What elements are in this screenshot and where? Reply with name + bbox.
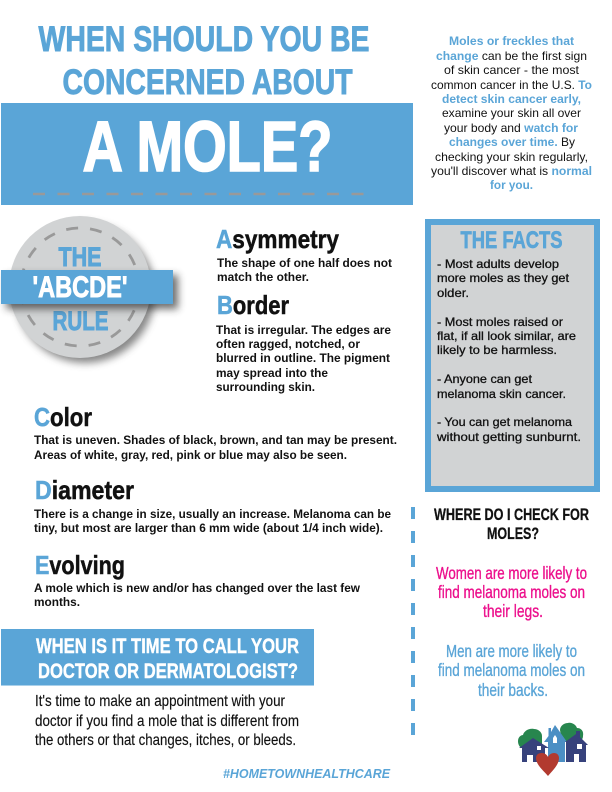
- panel: the facts: THE FACTS: [460, 227, 562, 254]
- panel: the facts: more moles as they get: [437, 271, 570, 285]
- diameter: There is a change in size, usually an increase. Melanoma can be: [34, 507, 391, 521]
- intro text: detect skin cancer early,: [442, 92, 581, 106]
- women note: their legs.: [483, 601, 543, 621]
- intro text: of skin cancer - the most: [444, 63, 580, 77]
- evolving: Evolving: [35, 550, 125, 580]
- title banner: a mole: [1, 103, 413, 205]
- badge: the ABCDE rule: [1, 216, 178, 363]
- intro text: checking your skin regularly,: [435, 150, 588, 164]
- asymmetry: match the other.: [217, 270, 309, 284]
- border: may spread into the: [216, 366, 328, 380]
- border: surrounding skin.: [216, 380, 315, 394]
- intro text: common cancer in the U.S. To: [431, 78, 592, 92]
- border: That is irregular. The edges are: [216, 323, 391, 337]
- intro text: [431, 34, 592, 192]
- panel: the facts: likely to be harmless.: [437, 343, 557, 357]
- title: WHEN SHOULD YOU BE: [38, 19, 370, 59]
- badge: the ABCDE rule: RULE: [52, 306, 108, 336]
- intro text: changes over time. By: [449, 135, 575, 149]
- where to check heading: MOLES?: [487, 524, 539, 543]
- intro text: you'll discover what is normal: [431, 164, 592, 178]
- call to action text: [35, 693, 299, 749]
- diameter: [34, 475, 391, 535]
- intro text: your body and watch for: [444, 121, 578, 135]
- diameter: tiny, but most are larger than 6 mm wide (about 1/4 inch wide).: [34, 521, 383, 535]
- border: blurred in outline. The pigment: [216, 351, 390, 365]
- badge: the ABCDE rule: 'ABCDE': [32, 271, 128, 304]
- intro text: examine your skin all over: [442, 106, 581, 120]
- asymmetry: Asymmetry: [216, 224, 339, 254]
- color: That is uneven. Shades of black, brown, and tan may be present.: [34, 433, 397, 447]
- men note: [438, 641, 585, 700]
- panel: the facts: without getting sunburnt.: [436, 430, 581, 444]
- where to check heading: [434, 505, 589, 543]
- evolving: A mole which is new and/or has changed over the last few: [34, 581, 361, 595]
- icon: hometown houses and heart logo: [518, 723, 588, 776]
- panel: the facts: [425, 219, 600, 492]
- color: [34, 402, 397, 462]
- call to action banner: WHEN IS IT TIME TO CALL YOUR: [36, 635, 299, 658]
- badge: the ABCDE rule: THE: [58, 242, 102, 272]
- call to action banner: DOCTOR OR DERMATOLOGIST?: [38, 660, 298, 683]
- women note: [436, 563, 587, 621]
- border: [216, 290, 391, 394]
- men note: their backs.: [478, 680, 548, 700]
- intro text: for you.: [490, 178, 533, 192]
- asymmetry: [216, 224, 392, 284]
- color: Color: [34, 402, 92, 432]
- panel: the facts: - Anyone can get: [437, 372, 533, 386]
- call to action text: It's time to make an appointment with your: [35, 693, 286, 710]
- panel: the facts: - Most moles raised or: [437, 315, 563, 329]
- call to action banner: [1, 629, 314, 686]
- hashtag: #HOMETOWNHEALTHCARE: [223, 766, 390, 781]
- call to action text: the others or that changes, itches, or bleeds.: [35, 732, 296, 749]
- panel: the facts: older.: [437, 286, 469, 300]
- evolving: [34, 550, 361, 609]
- intro text: change can be the first sign: [436, 49, 587, 63]
- evolving: months.: [34, 595, 80, 609]
- diameter: Diameter: [35, 475, 134, 505]
- intro text: Moles or freckles that: [449, 34, 574, 48]
- panel: the facts: - You can get melanoma: [437, 415, 572, 429]
- color: Areas of white, gray, red, pink or blue may also be seen.: [34, 448, 347, 462]
- border: often ragged, notched, or: [216, 337, 360, 351]
- asymmetry: The shape of one half does not: [217, 256, 392, 270]
- title: CONCERNED ABOUT: [62, 62, 353, 102]
- call to action text: doctor if you find a mole that is different from: [35, 713, 299, 730]
- border: Border: [217, 290, 289, 320]
- title: [38, 19, 370, 102]
- panel: the facts: melanoma skin cancer.: [437, 387, 566, 401]
- title banner: a mole: A MOLE?: [82, 108, 332, 187]
- panel: the facts: flat, if all look similar, are: [437, 329, 576, 343]
- panel: the facts: - Most adults develop: [437, 257, 559, 271]
